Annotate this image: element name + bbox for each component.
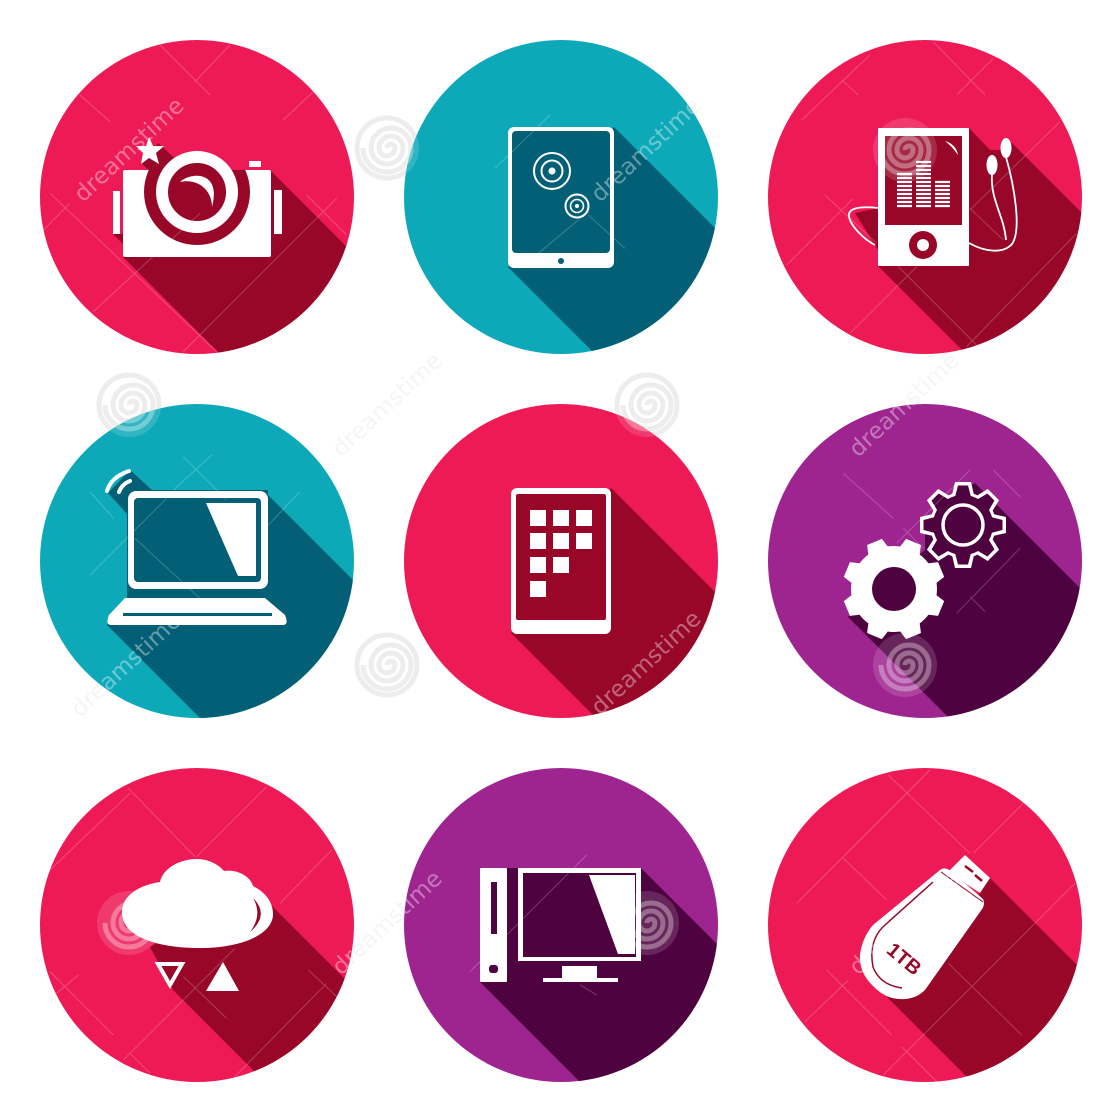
long shadow: tablet (508, 127, 715, 351)
panel: desktop computer icon (404, 768, 718, 1082)
long shadow: keypad tablet (511, 488, 715, 715)
long shadow: music player (855, 128, 1082, 350)
icon: music player with earphones (849, 128, 1017, 266)
long shadow: USB drive (887, 878, 1077, 1076)
panel: cloud icon (40, 768, 354, 1082)
icon: camera (113, 137, 282, 257)
icon: desktop computer (480, 868, 641, 982)
panel: USB drive icon (768, 768, 1100, 1090)
panel: camera icon (40, 40, 354, 354)
icon: small gear (920, 482, 1006, 568)
watermark: faint marks on the white background: dreamstime (66, 608, 186, 722)
label: capacity: 1TB (882, 939, 925, 980)
watermark: faint marks on the white background: dreamstime (327, 348, 447, 462)
icon: wifi laptop (107, 471, 287, 625)
icon: USB drive (860, 855, 990, 999)
long shadow: laptop (107, 471, 353, 718)
long shadow: gears (848, 483, 1080, 716)
icon: tablet with keypad (511, 488, 611, 634)
watermark: faint marks on the white background: dreamstime (327, 866, 447, 980)
panel: gears icon (768, 404, 1082, 718)
icon: large gear (827, 522, 961, 656)
watermark: text, spirals and lines over the circles: dreamstime (69, 93, 189, 207)
watermark: text, spirals and lines over the circles: dreamstime (586, 93, 706, 207)
watermark: faint marks on the white background: dreamstime (844, 348, 964, 462)
panel: music player icon (768, 40, 1082, 354)
watermark: faint marks on the white background: dreamstime (586, 93, 706, 207)
watermark: text, spirals and lines over the circles: dreamstime (66, 608, 186, 722)
watermark: text, spirals and lines over the circles: dreamstime (586, 606, 706, 720)
long shadow: camera (113, 143, 346, 352)
long shadow: cloud (150, 906, 344, 1072)
watermark: text, spirals and lines over the circles: dreamstime (327, 348, 447, 462)
icon: tablet with discs (508, 127, 614, 268)
watermark: text, spirals and lines over the circles: dreamstime (844, 348, 964, 462)
watermark: faint marks on the white background (66, 93, 964, 980)
watermark: faint marks on the white background: dreamstime (586, 606, 706, 720)
panel: keypad tablet icon (404, 404, 718, 718)
watermark: faint marks on the white background: dreamstime (69, 93, 189, 207)
watermark: text, spirals and lines over the circles: dreamstime (844, 866, 964, 980)
panel: tablet icon (404, 40, 718, 354)
panel: laptop icon (40, 404, 354, 718)
watermark: text, spirals and lines over the circles: dreamstime (327, 866, 447, 980)
icon: cloud with transfer arrows (122, 859, 273, 991)
long shadow: desktop computer (480, 868, 717, 1081)
